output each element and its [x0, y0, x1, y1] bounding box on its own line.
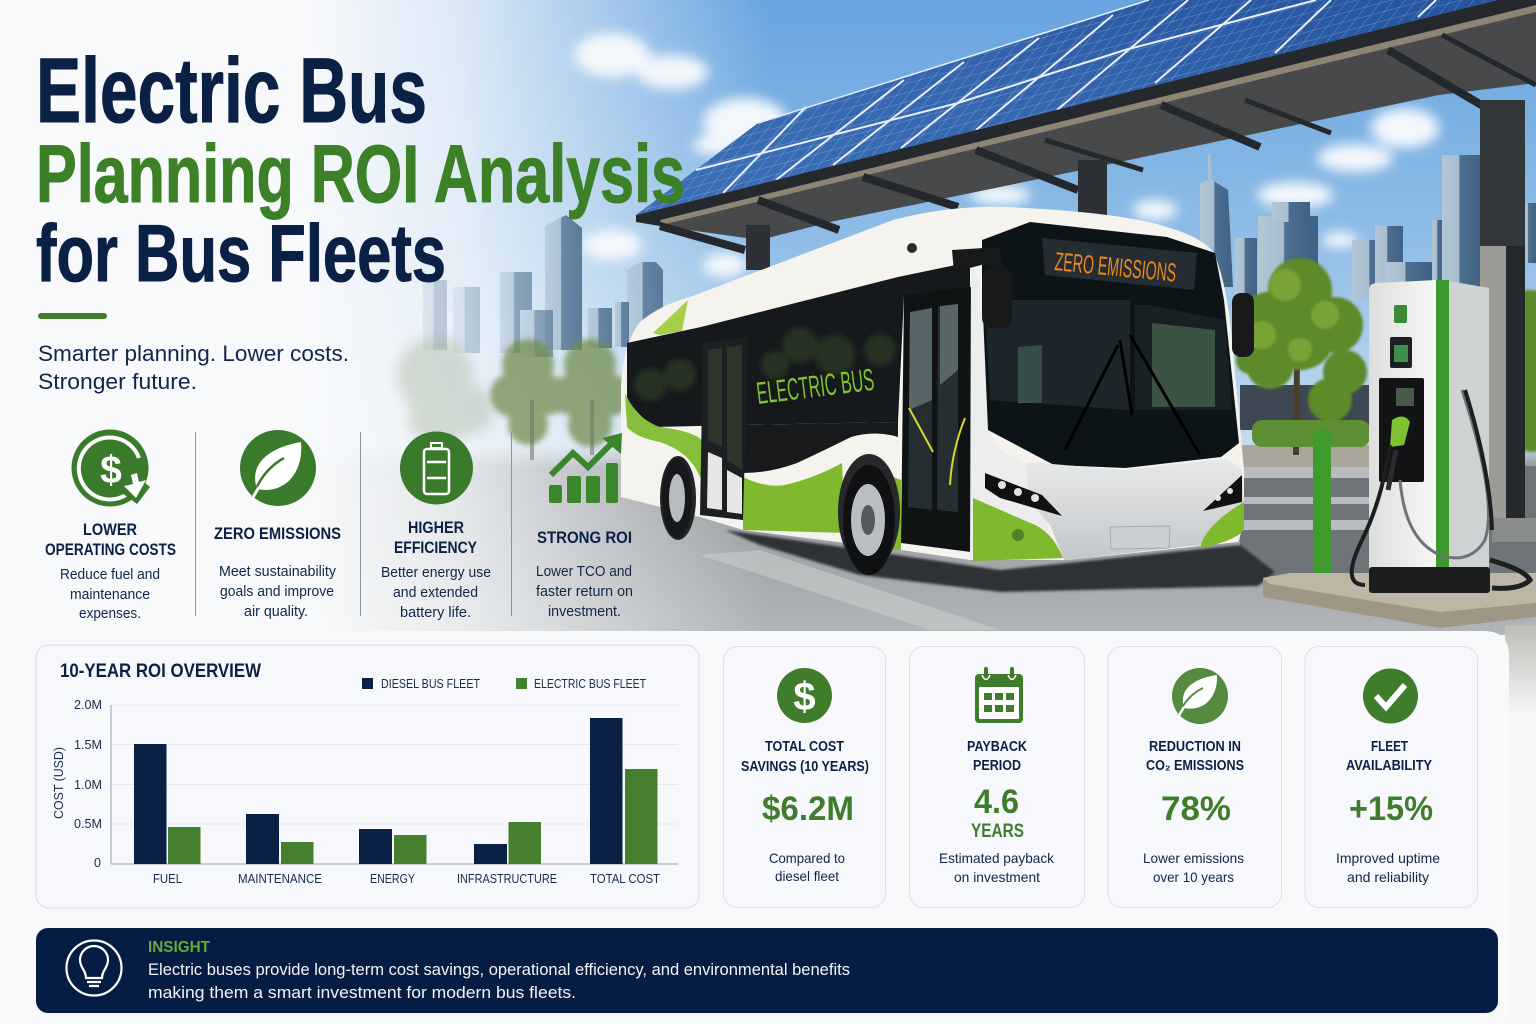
icon: growth chart	[549, 433, 622, 503]
KPI card: CO2 reduction: 78%	[1161, 790, 1231, 828]
subtitle: Smarter planning. Lower costs.	[38, 341, 349, 366]
KPI card: total cost savings: SAVINGS (10 YEARS)	[741, 759, 869, 775]
category labels: MAINTENANCE	[238, 872, 322, 886]
KPI card: fleet availability: AVAILABILITY	[1346, 758, 1432, 774]
feature: higher efficiency: and extended	[393, 585, 478, 601]
icon: lightbulb	[66, 940, 122, 996]
KPI card: CO2 reduction: CO₂ EMISSIONS	[1146, 758, 1244, 774]
KPI card: payback period: YEARS	[971, 821, 1024, 842]
bollard	[1313, 430, 1331, 584]
icon: leaf	[1172, 668, 1228, 724]
y axis labels	[74, 698, 102, 870]
KPI card: payback period: 4.6	[974, 783, 1019, 821]
KPI card: payback period: on investment	[954, 869, 1040, 885]
KPI card: fleet availability: Improved uptime	[1336, 850, 1440, 866]
category labels: INFRASTRUCTURE	[457, 872, 557, 886]
feature: strong ROI: faster return on	[536, 584, 633, 600]
feature: lower operating costs: Reduce fuel and	[60, 567, 160, 583]
legend: ELECTRIC BUS FLEET	[534, 677, 646, 691]
category labels: FUEL	[153, 872, 182, 886]
feature: zero emissions: Meet sustainability	[219, 564, 337, 580]
KPI card: total cost savings: TOTAL COST	[765, 739, 844, 755]
icon: dollar	[777, 668, 832, 723]
KPI card: payback period: PAYBACK	[967, 739, 1027, 755]
lower black side panel	[743, 422, 898, 473]
KPI card: CO2 reduction: Lower emissions	[1143, 850, 1244, 866]
background scene: sky and ground	[0, 0, 1536, 635]
category labels	[153, 872, 660, 886]
front mask	[1027, 458, 1244, 560]
feature: strong ROI: STRONG ROI	[537, 528, 632, 547]
electric bus	[621, 207, 1254, 575]
KPI card: total cost savings	[724, 646, 886, 908]
KPI card: CO2 reduction: REDUCTION IN	[1149, 739, 1241, 755]
KPI card: fleet availability	[1305, 646, 1478, 908]
bars	[134, 718, 622, 864]
feature: lower operating costs: OPERATING COSTS	[45, 540, 176, 559]
KPI card: CO2 reduction	[1108, 646, 1282, 908]
front green bumpers	[973, 498, 1063, 561]
headlights	[985, 473, 1062, 516]
subtitle	[38, 341, 349, 394]
windshield	[982, 222, 1239, 468]
KPI card: fleet availability: +15%	[1349, 790, 1433, 828]
solar canopy	[636, 0, 1536, 542]
feature: lower operating costs: LOWER	[83, 520, 137, 539]
side text: ELECTRIC BUS	[755, 362, 876, 411]
title accent bar	[38, 313, 107, 319]
y axis title: COST (USD)	[51, 747, 66, 819]
feature: strong ROI: Lower TCO and	[536, 564, 632, 580]
destination text: ZERO EMISSIONS	[1053, 246, 1178, 288]
right-side trees and hedge	[1236, 258, 1536, 455]
insight banner	[36, 928, 1498, 1013]
solar panels	[636, 0, 1497, 215]
front door	[901, 287, 971, 552]
canopy support posts	[746, 100, 1525, 518]
KPI card: fleet availability: FLEET	[1371, 739, 1408, 755]
insight banner: Electric buses provide long-term cost savings, operational efficiency, and environmental benefits	[148, 960, 850, 979]
y axis labels: 0.5M	[74, 817, 102, 831]
canopy struts	[660, 35, 1536, 250]
legend	[362, 677, 646, 691]
feature: strong ROI: investment.	[548, 604, 621, 620]
icon: check	[1363, 668, 1418, 724]
feature: lower operating costs	[45, 430, 176, 622]
rear door	[700, 337, 748, 520]
KPI card: payback period: PERIOD	[973, 758, 1021, 774]
insight banner: making them a smart investment for modern bus fleets.	[148, 983, 576, 1002]
category labels: TOTAL COST	[590, 872, 660, 886]
KPI card: payback period	[910, 646, 1084, 908]
icon: dollar cycle: $	[100, 449, 122, 492]
insight banner: INSIGHT	[148, 939, 210, 956]
title: for Bus Fleets	[36, 209, 446, 299]
feature: lower operating costs: expenses.	[79, 606, 141, 622]
category labels: ENERGY	[370, 872, 416, 886]
KPI card: fleet availability: and reliability	[1347, 869, 1429, 885]
feature: higher efficiency: HIGHER	[408, 518, 464, 537]
y axis labels: 2.0M	[74, 698, 102, 712]
title: Electric Bus	[36, 40, 427, 142]
feature: zero emissions: air quality.	[244, 604, 308, 620]
feature: higher efficiency: EFFICIENCY	[394, 538, 478, 557]
feature dividers	[196, 432, 512, 616]
mirrors	[952, 247, 1003, 272]
chart title: 10-YEAR ROI OVERVIEW	[60, 661, 261, 682]
icon: dollar: $	[793, 675, 816, 719]
plate and lights	[1110, 526, 1170, 549]
feature: higher efficiency: battery life.	[400, 605, 471, 621]
EV charger	[1352, 280, 1530, 593]
y axis labels: 0	[94, 856, 101, 870]
front pillar	[970, 262, 1060, 560]
white left fade	[0, 0, 770, 640]
feature: higher efficiency	[381, 432, 491, 621]
wheels	[660, 456, 696, 540]
feature: zero emissions	[214, 430, 341, 620]
y axis labels: 1.0M	[74, 778, 102, 792]
frame and underside	[636, 0, 1536, 226]
KPI card: payback period: Estimated payback	[939, 850, 1055, 866]
KPI card: CO2 reduction: over 10 years	[1153, 869, 1234, 885]
panel: 10-year ROI chart	[36, 645, 699, 908]
feature: lower operating costs: maintenance	[70, 587, 150, 603]
bus shadow on ground	[725, 530, 1275, 592]
icon: dollar cycle	[72, 430, 150, 506]
title	[36, 40, 685, 299]
bus body	[621, 207, 1244, 560]
title: Planning ROI Analysis	[36, 129, 685, 220]
subtitle: Stronger future.	[38, 369, 197, 394]
icon: leaf	[240, 430, 316, 506]
icon: battery	[400, 432, 473, 504]
feature: zero emissions: ZERO EMISSIONS	[214, 524, 341, 543]
feature: strong ROI	[536, 433, 633, 620]
faded skyline and trees behind title	[397, 215, 663, 460]
feature: higher efficiency: Better energy use	[381, 565, 491, 581]
feature: zero emissions: goals and improve	[220, 584, 334, 600]
bottom dashboard background	[0, 625, 1536, 1024]
y axis labels: 1.5M	[74, 738, 102, 752]
side windows	[627, 262, 970, 427]
icon: calendar	[975, 669, 1023, 723]
KPI card: total cost savings: Compared to	[769, 850, 845, 866]
KPI card: total cost savings: diesel fleet	[775, 868, 839, 884]
concrete charger base	[1263, 573, 1536, 628]
KPI card: total cost savings: $6.2M	[762, 790, 854, 828]
destination sign	[1042, 238, 1197, 290]
legend: DIESEL BUS FLEET	[381, 677, 480, 691]
green livery swoosh	[625, 393, 743, 497]
